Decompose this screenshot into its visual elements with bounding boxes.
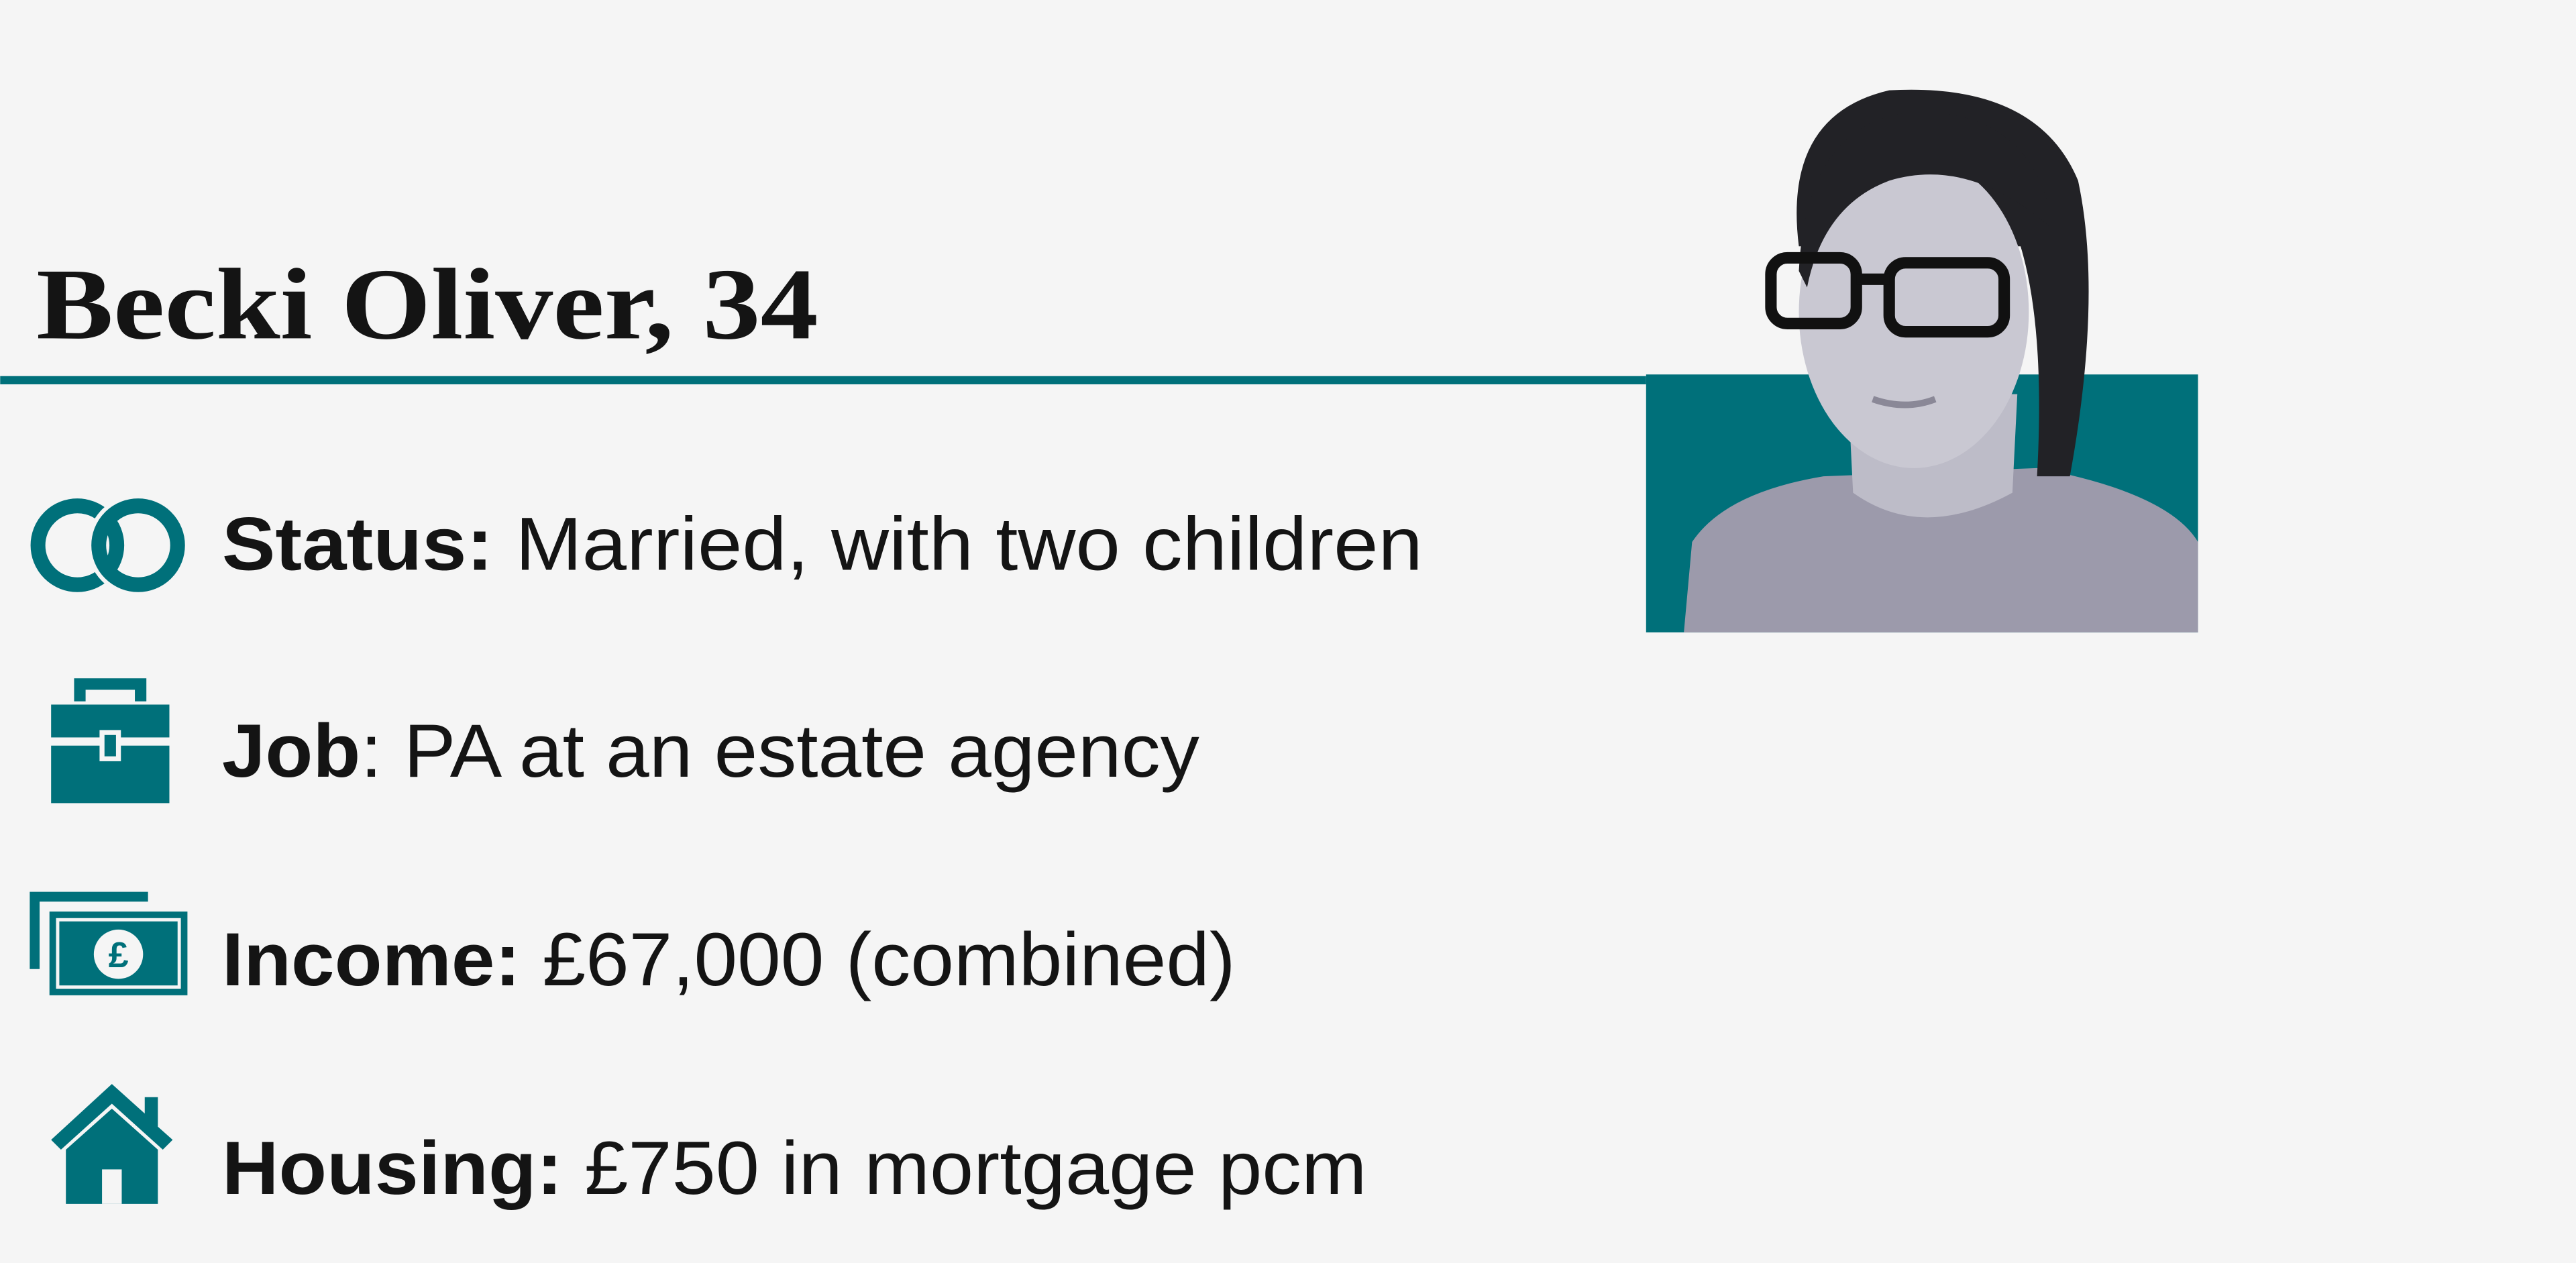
row: status: Status: Married, with two children (222, 502, 1423, 586)
row: income: Income: £67,000 (combined) (222, 917, 1236, 1001)
face (1799, 156, 2029, 468)
neck (1848, 394, 2017, 517)
photo panel (1646, 90, 2198, 633)
row: job: Job: PA at an estate agency (222, 708, 1199, 793)
row: housing: Housing: £750 in mortgage pcm (222, 1125, 1367, 1210)
icon: house (51, 1084, 172, 1204)
title: Becki Oliver, 34 (36, 248, 818, 360)
hair back (1796, 90, 2089, 476)
row: income (30, 892, 1236, 1001)
row: job (51, 678, 1199, 803)
icon: rings (38, 499, 184, 592)
glasses (1771, 258, 2004, 332)
icon: briefcase (51, 678, 169, 803)
shoulders (1684, 468, 2198, 633)
row: housing (51, 1084, 1367, 1210)
icon: banknotes: £ (109, 935, 129, 975)
icon: banknotes (30, 892, 187, 995)
hair fringe (1799, 112, 2053, 288)
